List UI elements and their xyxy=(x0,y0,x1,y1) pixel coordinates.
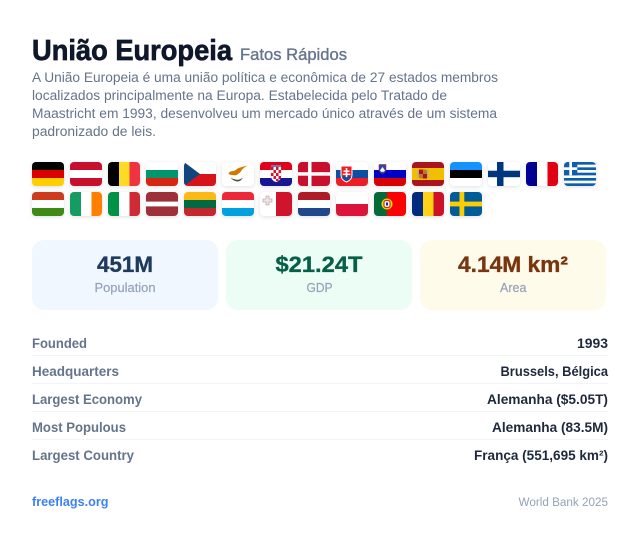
flag: Slovakia xyxy=(336,162,368,186)
flag: Germany xyxy=(32,162,64,186)
fact row: largest economy xyxy=(32,392,608,407)
flag: Latvia xyxy=(146,192,178,216)
fact row: founded: 1993 xyxy=(577,336,608,351)
description text: padronizado de leis. xyxy=(32,124,156,139)
stat card: GDP: $21.24T xyxy=(276,252,363,277)
stat card: GDP xyxy=(226,240,412,310)
fact row: headquarters xyxy=(32,364,608,379)
flag grid xyxy=(32,162,596,216)
fact row: headquarters: Headquarters xyxy=(32,364,119,379)
flag: Croatia xyxy=(260,162,292,186)
stat card: GDP: GDP xyxy=(306,281,332,295)
flag: Hungary xyxy=(32,192,64,216)
flag: Portugal xyxy=(374,192,406,216)
stat card: area: 4.14M km² xyxy=(458,252,568,277)
flag: Bulgaria xyxy=(146,162,178,186)
flag: Greece xyxy=(564,162,596,186)
flag: Estonia xyxy=(450,162,482,186)
flag: Finland xyxy=(488,162,520,186)
fact row: most populous: Most Populous xyxy=(32,420,126,435)
flag: Spain xyxy=(412,162,444,186)
stat card: area: Area xyxy=(500,281,527,295)
flag: Denmark xyxy=(298,162,330,186)
fact row: largest economy: Alemanha ($5.05T) xyxy=(487,392,608,407)
flag: Luxembourg xyxy=(222,192,254,216)
fact row: largest country: França (551,695 km²) xyxy=(474,448,608,463)
flag: Netherlands xyxy=(298,192,330,216)
footer link: freeflags.org xyxy=(32,494,109,509)
stat card: area xyxy=(420,240,606,310)
flag: Lithuania xyxy=(184,192,216,216)
fact row: most populous xyxy=(32,420,608,435)
flag: Cyprus xyxy=(222,162,254,186)
stat card: population: 451M xyxy=(97,252,153,277)
flag: Sweden xyxy=(450,192,482,216)
flag: Italy xyxy=(108,192,140,216)
flag: France xyxy=(526,162,558,186)
stat card: population: Population xyxy=(94,281,156,295)
description text: Maastricht em 1993, desenvolveu um mercado único através de um sistema xyxy=(32,106,498,121)
fact row: most populous: Alemanha (83.5M) xyxy=(492,420,608,435)
flag: Malta xyxy=(260,192,292,216)
flag: Ireland xyxy=(70,192,102,216)
flag: Romania xyxy=(412,192,444,216)
fact row: founded xyxy=(32,336,608,351)
description text xyxy=(32,70,498,139)
fact row: largest country xyxy=(32,448,608,463)
fact row: headquarters: Brussels, Bélgica xyxy=(500,364,608,379)
subtitle: Fatos Rápidos xyxy=(240,46,347,64)
flag: Austria xyxy=(70,162,102,186)
flag: Slovenia xyxy=(374,162,406,186)
fact row: founded: Founded xyxy=(32,336,87,351)
flag: Belgium xyxy=(108,162,140,186)
fact row: largest country: Largest Country xyxy=(32,448,134,463)
flag: Czechia xyxy=(184,162,216,186)
fact row: largest economy: Largest Economy xyxy=(32,392,142,407)
description text: A União Europeia é uma união política e econômica de 27 estados membros xyxy=(32,70,498,85)
stat card: population xyxy=(32,240,218,310)
footer source: World Bank 2025 xyxy=(518,497,608,509)
description text: localizados principalmente na Europa. Estabelecida pelo Tratado de xyxy=(32,88,447,103)
flag: Poland xyxy=(336,192,368,216)
title: União Europeia xyxy=(32,35,233,67)
